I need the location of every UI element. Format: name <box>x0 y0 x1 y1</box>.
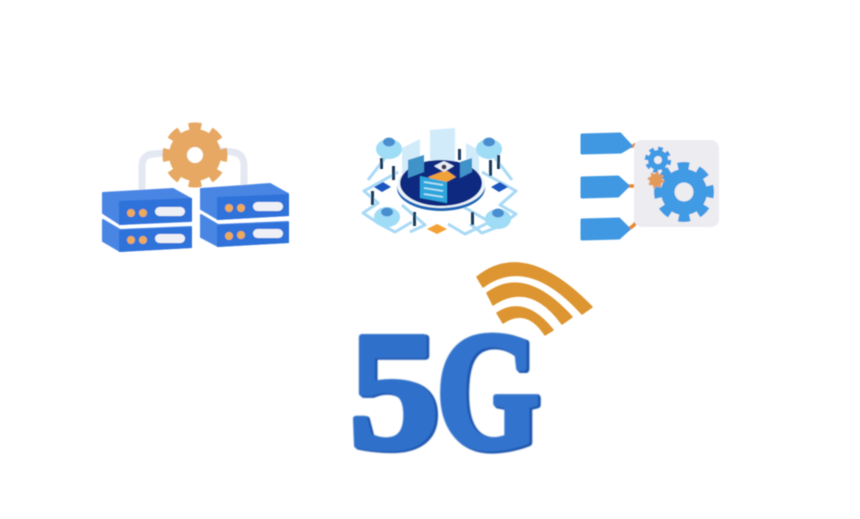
central disk <box>397 155 485 211</box>
wifi signal arcs <box>477 263 592 335</box>
orange gear <box>649 173 663 187</box>
gear <box>167 127 223 183</box>
5G wordmark: 5 <box>349 297 439 484</box>
server: left top <box>103 189 192 225</box>
5G wordmark: G <box>436 297 539 484</box>
connector pipes <box>142 150 244 195</box>
icon: servers with gear <box>103 127 289 252</box>
card <box>634 140 719 227</box>
5G wordmark <box>349 297 541 485</box>
icon: tags and gears card <box>582 134 719 239</box>
circuit lines <box>363 158 516 234</box>
satellite domes <box>374 138 511 229</box>
server: right top <box>201 184 289 220</box>
small gear <box>647 149 669 171</box>
server: left bottom <box>103 220 192 252</box>
glass panels <box>402 128 479 206</box>
icon: isometric data platform <box>363 128 516 234</box>
server: right bottom <box>201 215 289 247</box>
tag 3 <box>582 219 629 239</box>
people figures <box>371 149 500 226</box>
connectors <box>622 144 637 230</box>
5G wordmark: G <box>438 298 541 485</box>
orange and blue tiles <box>374 182 508 234</box>
5G wordmark: 5 <box>351 298 441 485</box>
large gear <box>659 167 709 217</box>
tag 2 <box>582 177 628 197</box>
tag 1 <box>582 134 631 153</box>
